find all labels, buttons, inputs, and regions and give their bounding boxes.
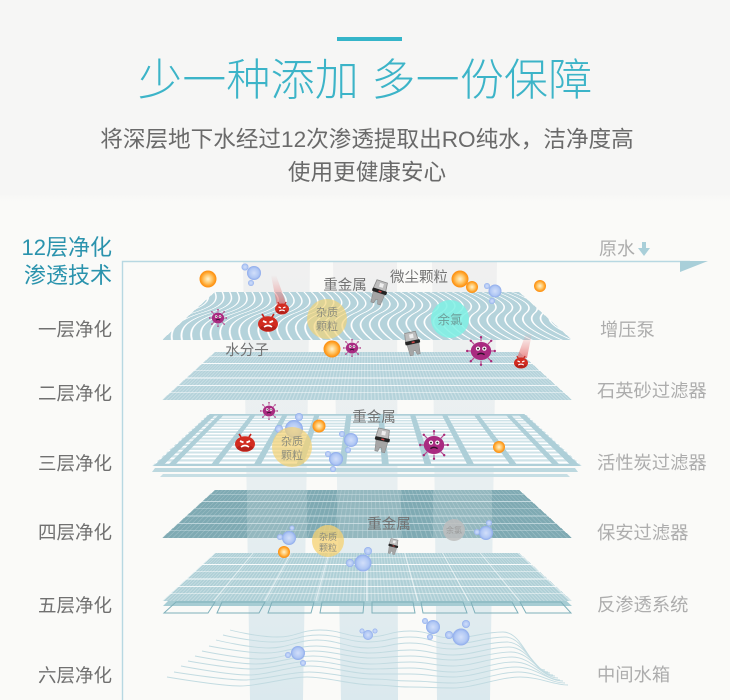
right equipment labels: 反渗透系统 xyxy=(597,594,688,615)
impurity circle, layer 3 xyxy=(272,413,312,467)
title: 少一种添加 多一份保障 xyxy=(138,56,592,105)
accent bar xyxy=(337,37,402,41)
residual chlorine circle: 余氯 xyxy=(437,312,463,327)
left stage labels xyxy=(38,319,112,686)
left stage labels: 二层净化 xyxy=(38,383,112,404)
layer 2: fine grid filter xyxy=(162,352,572,400)
impurity circle, layer 1 xyxy=(307,299,347,339)
side heading xyxy=(22,235,112,288)
right equipment labels: 活性炭过滤器 xyxy=(597,452,707,473)
callout labels: 重金属 xyxy=(323,277,367,294)
layer 5: reverse osmosis membrane xyxy=(162,553,572,601)
callout labels: 重金属 xyxy=(352,409,396,426)
heavy metal particles xyxy=(368,279,423,555)
residual chlorine circle xyxy=(431,300,469,338)
impurity circle, layer 4: 杂质 xyxy=(319,531,337,542)
right equipment labels: 中间水箱 xyxy=(597,664,670,685)
left stage labels: 四层净化 xyxy=(38,522,112,543)
impurity circle, layer 3: 杂质 xyxy=(281,435,303,448)
impurity circle, layer 1: 颗粒 xyxy=(316,319,338,333)
purple viruses xyxy=(209,309,496,460)
callout labels: 微尘颗粒 xyxy=(390,269,448,286)
right equipment labels: 增压泵 xyxy=(600,319,655,340)
impurity circle, layer 1: 杂质 xyxy=(316,306,338,319)
left stage labels: 六层净化 xyxy=(38,665,112,686)
subtitle xyxy=(100,127,634,185)
left stage labels: 五层净化 xyxy=(38,595,112,616)
layer 3: slatted activated carbon filter xyxy=(152,414,582,466)
orange balls xyxy=(200,270,546,558)
subtitle: 使用更健康安心 xyxy=(288,160,446,185)
callout labels: 水分子 xyxy=(225,342,269,359)
callout labels: 重金属 xyxy=(367,516,411,533)
side heading: 12层净化 xyxy=(22,235,112,260)
impurity circle, layer 3: 颗粒 xyxy=(281,448,303,462)
layer 1: wave filter membrane xyxy=(162,292,571,340)
left stage labels: 一层净化 xyxy=(38,319,112,340)
residual chlorine circle, faded: 余氯 xyxy=(446,525,462,535)
right equipment labels xyxy=(597,319,707,685)
red germ trails xyxy=(271,275,532,358)
side heading: 渗透技术 xyxy=(24,263,112,288)
red germs xyxy=(235,302,528,452)
right equipment labels: 石英砂过滤器 xyxy=(597,380,707,401)
column tint over dark layer xyxy=(247,490,492,538)
layer 4: dark security filter xyxy=(162,490,572,538)
right equipment labels: 保安过滤器 xyxy=(597,522,688,543)
callout labels xyxy=(225,269,448,533)
subtitle: 将深层地下水经过12次渗透提取出RO纯水，洁净度高 xyxy=(100,127,634,152)
raw water label: 原水 xyxy=(599,239,635,259)
axis frame xyxy=(122,261,708,700)
impurity circle, layer 4: 颗粒 xyxy=(319,542,337,553)
left stage labels: 三层净化 xyxy=(38,453,112,474)
layer 6: water wave lines xyxy=(167,630,568,688)
residual chlorine circle, faded xyxy=(443,519,465,541)
water molecules xyxy=(242,264,502,666)
impurity circle, layer 4 xyxy=(312,525,344,557)
